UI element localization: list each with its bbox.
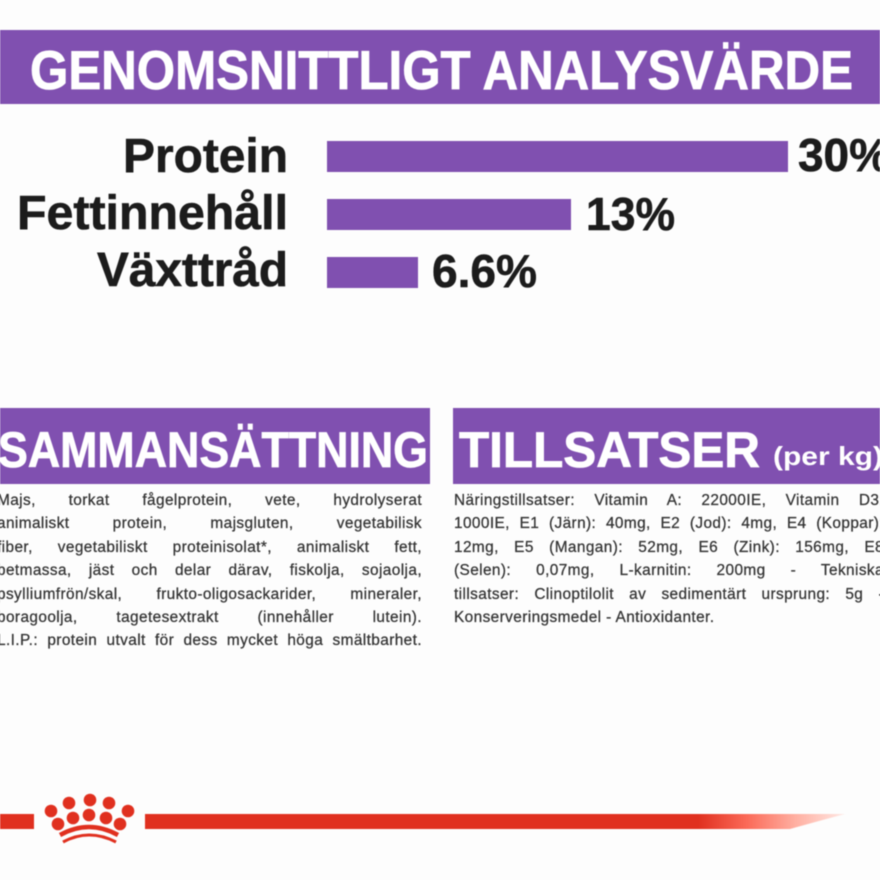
row: fat content: [17, 187, 675, 240]
text block: composition: fiber, vegetabiliskt proteinisolat*, animaliskt fett,: [0, 539, 422, 556]
row: fat content: 13%: [586, 188, 675, 240]
heading: composition: SAMMANSÄTTNING: [0, 422, 428, 478]
text block: additives: Konserveringsmedel - Antioxidanter.: [454, 609, 714, 626]
row: fat content: Fettinnehåll: [17, 187, 288, 240]
row: fibre: Växttråd: [97, 244, 288, 297]
footer line: [0, 814, 845, 829]
text block: composition: [0, 491, 422, 650]
heading: additives: TILLSATSER: [459, 422, 760, 478]
heading: composition: [0, 408, 430, 484]
row: protein: Protein: [123, 130, 288, 183]
text block: composition: animaliskt protein, majsgluten, vegetabilisk: [0, 515, 422, 532]
text block: composition: Majs, torkat fågelprotein, vete, hydrolyserat: [0, 492, 422, 509]
row: fibre: [97, 244, 537, 297]
text block: composition: boragoolja, tagetesextrakt (innehåller lutein).: [0, 609, 422, 626]
text block: additives: 12mg, E5 (Mangan): 52mg, E6 (Zink): 156mg, E8: [454, 539, 880, 556]
text block: composition: betmassa, jäst och delar därav, fiskolja, sojaolja,: [0, 562, 422, 579]
heading: additives: (per kg): [773, 441, 880, 471]
row: fibre: 6.6%: [432, 245, 537, 297]
text block: composition: psylliumfrön/skal, frukto-oligosackarider, mineraler,: [0, 586, 422, 603]
text block: additives: (Selen): 0,07mg, L-karnitin: 200mg - Tekniska: [454, 562, 880, 579]
text block: additives: tillsatser: Clinoptilolit av sedimentärt ursprung: 5g -: [454, 586, 880, 603]
text block: additives: Näringstillsatser: Vitamin A: 22000IE, Vitamin D3:: [454, 492, 880, 509]
heading: additives: [453, 408, 880, 484]
text block: additives: 1000IE, E1 (Järn): 40mg, E2 (Jod): 4mg, E4 (Koppar):: [454, 515, 880, 532]
text block: additives: [453, 492, 880, 626]
icon: royal crown logo: [45, 794, 134, 842]
bar chart: average analysis values: [17, 129, 880, 297]
text block: composition: L.I.P.: protein utvalt för dess mycket höga smältbarhet.: [0, 632, 422, 649]
row: protein: [123, 129, 880, 183]
